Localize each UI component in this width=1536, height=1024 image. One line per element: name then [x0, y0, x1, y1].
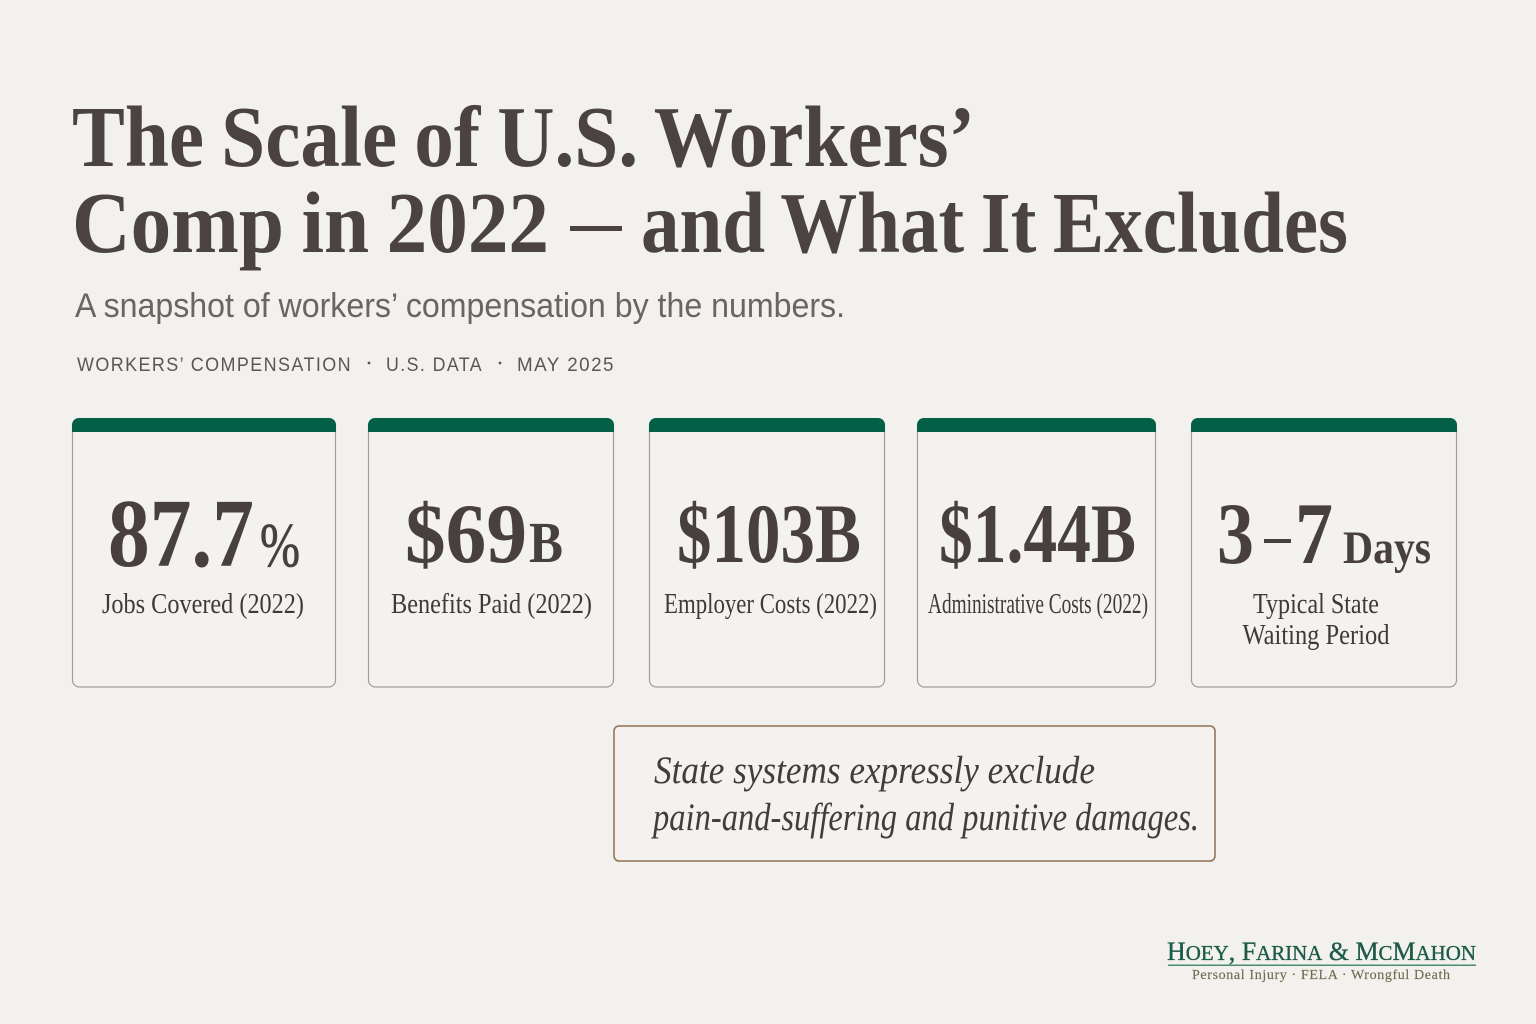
label: waiting period: Waiting Period: [1242, 620, 1390, 651]
title: Comp in 2022: [72, 174, 549, 271]
label: benefits paid: Benefits Paid (2022): [391, 589, 592, 620]
stat: 3–7 days: 7: [1295, 486, 1333, 583]
callout: [614, 726, 1215, 861]
stat: $103B: $103B: [677, 487, 861, 581]
eyebrow: WORKERS’ COMPENSATION: [77, 355, 352, 376]
callout: State systems expressly exclude: [654, 749, 1095, 792]
stat: $69B: B: [529, 510, 563, 575]
eyebrow: [77, 355, 615, 376]
stat: 3–7 days: Days: [1343, 522, 1431, 574]
logo: Personal Injury · FELA · Wrongful Death: [1192, 968, 1450, 983]
panel: administrative costs: [917, 418, 1156, 687]
stat: 3–7 days: [1217, 486, 1431, 583]
label: jobs covered: Jobs Covered (2022): [102, 589, 304, 620]
logo: [1167, 937, 1476, 983]
panel: employer costs: [649, 418, 885, 687]
logo: HOEY, FARINA & MCMAHON: [1167, 937, 1476, 966]
stat: $69B: $69: [405, 487, 527, 581]
subtitle: A snapshot of workers’ compensation by the numbers.: [75, 287, 845, 325]
stat: 3–7 days: 3: [1217, 486, 1254, 583]
stat: $1.44B: $1.44B: [939, 487, 1136, 581]
eyebrow: MAY 2025: [517, 355, 615, 376]
panel: waiting period: [1191, 418, 1457, 687]
stat: 87.7%: 87.7: [108, 480, 254, 588]
stat: 87.7%: %: [260, 512, 300, 580]
callout: pain-and-suffering and punitive damages.: [650, 796, 1199, 839]
label: waiting period: [1242, 589, 1390, 651]
panel: benefits paid: [368, 418, 614, 687]
panel: jobs covered: [72, 418, 336, 687]
eyebrow: U.S. DATA: [386, 355, 483, 376]
label: employer costs: Employer Costs (2022): [664, 589, 877, 620]
title: [72, 88, 1348, 271]
label: waiting period: Typical State: [1253, 589, 1379, 620]
title: and What It Excludes: [641, 174, 1348, 271]
label: administrative costs: Administrative Costs (2022): [928, 589, 1148, 620]
title: The Scale of U.S. Workers’: [72, 88, 975, 185]
